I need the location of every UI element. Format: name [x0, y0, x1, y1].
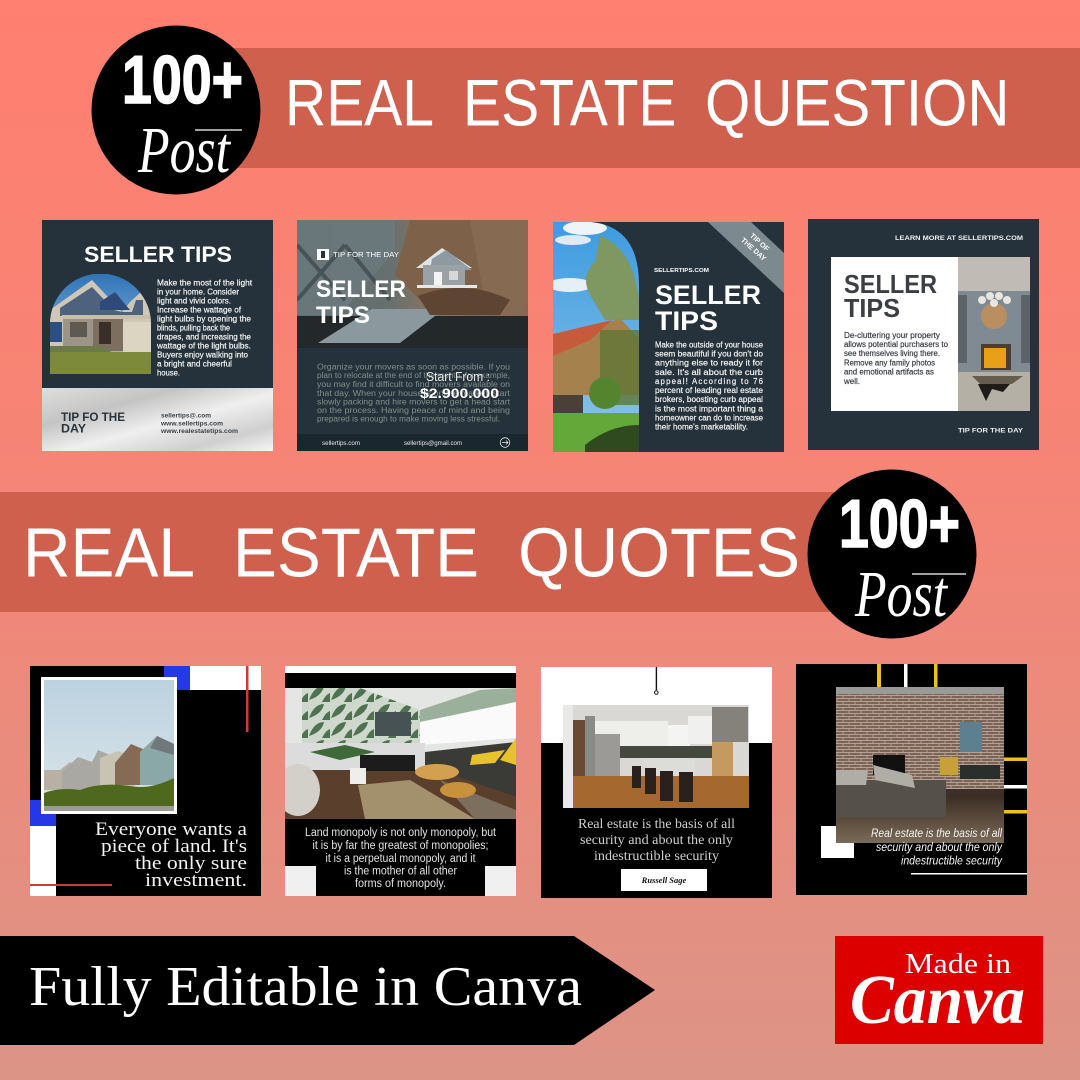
- quote card 4 accent stripes: [877, 664, 1027, 874]
- quote card 1 text: investment.: [145, 871, 247, 891]
- card 2 photo: hand holding model house: [297, 220, 528, 348]
- card 3 photo: wooden house and tree in arch: [548, 221, 640, 452]
- heading: real estate quotes: QUOTES: [518, 514, 800, 592]
- heading: real estate question: [285, 66, 1010, 140]
- quote card 3 text: Real estate is the basis of all: [578, 816, 735, 831]
- card 2 footer contact: sellertips.com: [322, 440, 360, 447]
- card 3 body text: their home's marketability.: [655, 423, 748, 432]
- card 3 title: TIPS: [655, 306, 718, 336]
- card 1 contact text: www.realestatetips.com: [160, 428, 238, 435]
- card 4 body text: allows potential purchasers to: [844, 340, 949, 349]
- heading: real estate question: QUESTION: [705, 66, 1010, 140]
- quote card 3 white top: [541, 667, 772, 743]
- heading: real estate question: ESTATE: [463, 66, 676, 140]
- header banner: real estate quotes: [0, 492, 850, 612]
- quote card 1 text: the only sure: [135, 854, 247, 874]
- card 1 contact text: sellertips@.com: [161, 412, 211, 420]
- panel: quote card 1: [30, 666, 261, 896]
- panel: quote card 3: [541, 667, 772, 898]
- card 1 title: SELLER TIPS: [84, 242, 232, 267]
- badge: 100+ post (middle): [808, 470, 976, 638]
- card 4 title: TIPS: [844, 293, 900, 323]
- quote card 2 text: it is by far the greatest of monopolies;: [312, 840, 488, 852]
- card 2 body text: that day. When your house is on the market, start: [317, 389, 511, 398]
- card 2 body text: slowly packing and hire movers to get a head start: [317, 398, 511, 406]
- badge: 100+ post (top): [92, 26, 260, 194]
- quote card 1 text: piece of land. It's: [101, 837, 247, 857]
- card 1 photo: suburban house in arch: [50, 274, 151, 374]
- quote card 4 text: indestructible security: [901, 854, 1003, 868]
- panel: seller tips card 4: [808, 219, 1039, 450]
- card 1 body text: blinds, pulling back the: [157, 324, 230, 332]
- card 4 body text: well.: [843, 377, 860, 386]
- card 2 title: TIPS: [316, 302, 370, 329]
- quote card 1 photo frame: [41, 677, 177, 814]
- quote card 1 photo: row of houses: [44, 680, 174, 811]
- card 2 price overlay: $2.900.000: [420, 386, 499, 401]
- quote card 4 text: security and about the only: [876, 840, 1003, 854]
- card 1 tip label: DAY: [61, 422, 86, 436]
- quote card 3 author button: Russell Sage: [641, 875, 687, 885]
- quote card 4 white square: [821, 826, 854, 858]
- heading: real estate quotes: [23, 514, 800, 592]
- quote card 2 corner blocks: [285, 866, 516, 896]
- card 2 icon: arrow circle: [500, 438, 510, 447]
- badge: 100+ post (middle): Post: [854, 558, 948, 631]
- heading: real estate quotes: ESTATE: [233, 514, 479, 592]
- card 3 body text: [655, 340, 764, 432]
- quote card 2 top strip: [285, 666, 516, 673]
- badge: 100+ post (top): 100+: [122, 42, 243, 118]
- card 3 body text: homeowner can do to increase: [655, 414, 763, 422]
- card 1 body text: in your home. Consider: [157, 288, 239, 296]
- card 3 body text: brokers, boosting curb appeal: [655, 395, 763, 404]
- panel: seller tips card 1: [42, 220, 273, 451]
- quote card 3 photo: kitchen: [563, 705, 749, 808]
- card 2 price overlay: Start From :: [426, 370, 490, 384]
- card 3 body text: percent of leading real estate: [655, 386, 763, 395]
- quote card 4 text: [871, 826, 1003, 868]
- card 3 ribbon text: TIP OF: [748, 231, 772, 254]
- card 3 site label: SELLERTIPS.COM: [654, 268, 709, 274]
- card 1 tip label: [61, 410, 125, 436]
- quote card 4 photo: brick wall loft: [836, 687, 1004, 843]
- quote card 3 author button: [621, 869, 707, 891]
- quote card 3 text: security and about the only: [580, 832, 733, 847]
- card 2 tip label: TIP FOR THE DAY: [333, 250, 399, 259]
- quote card 2 text: forms of monopoly.: [355, 878, 446, 890]
- card 4 photo: living room with fireplace: [958, 257, 1030, 411]
- card 2 title: SELLER: [316, 276, 406, 303]
- badge: 100+ post (top): Post: [137, 114, 231, 187]
- badge: 100+ post (middle): 100+: [839, 486, 960, 562]
- call-to-action text: Fully Editable in Canva: [29, 956, 582, 1018]
- card 2 footer contact: [322, 440, 462, 447]
- card 3 body text: is the most important thing a: [655, 404, 764, 413]
- card 3 ribbon text: THE DAY: [739, 235, 768, 263]
- card 4 body text: and emotional artifacts as: [844, 368, 934, 377]
- card 4 top link: LEARN MORE AT SELLERTIPS.COM: [895, 235, 1023, 242]
- card 2 footer bar: [297, 434, 528, 451]
- card 3 body text: appeal! According to 76: [655, 377, 763, 386]
- card 2 logo icon: [317, 249, 329, 260]
- quote card 2 text: is the mother of all other: [344, 866, 457, 878]
- quote card 1 text: Everyone wants a: [95, 820, 247, 840]
- card 1 body text: Make the most of the light: [157, 278, 253, 288]
- card 1 body text: light bulbs by opening the: [157, 314, 251, 324]
- heading: real estate quotes: REAL: [23, 514, 195, 592]
- card 4 footer label: TIP FOR THE DAY: [958, 428, 1024, 434]
- quote card 1 corner blocks: [30, 666, 261, 896]
- card 4 title: [844, 269, 937, 323]
- card 2 body text: you may find it difficult to find movers available on: [317, 380, 510, 389]
- card 3 body text: sale. It's all about the curb: [655, 368, 764, 377]
- panel: seller tips card 2: [297, 220, 528, 451]
- quote card 2 photo: living room with sofa: [276, 688, 516, 819]
- quote card 3 text: [578, 816, 735, 863]
- card 2 title: [316, 276, 406, 329]
- quote card 3 text: indestructible security: [594, 848, 719, 863]
- canva script wordmark: Canva: [850, 962, 1025, 1039]
- card 1 contact text: www.sellertips.com: [160, 420, 223, 428]
- card 1 body text: [156, 278, 253, 378]
- card 2 body text: plan to relocate at the end of the month, for example,: [317, 371, 510, 380]
- card 1 body text: a bright and cheerful: [157, 360, 232, 368]
- card 3 title: SELLER: [655, 280, 761, 310]
- card 1 body text: light and vivid colors.: [157, 296, 231, 306]
- header banner: real estate question: [230, 48, 1080, 168]
- card 1 tip label: TIP FO THE: [61, 410, 125, 424]
- card 3 body text: seem beautiful if you don't do: [655, 350, 764, 358]
- card 2 body text: Organize your movers as soon as possible. If you: [317, 362, 510, 372]
- card 1 body text: Buyers enjoy walking into: [157, 350, 249, 360]
- made in canva badge: [835, 936, 1043, 1044]
- card 4 body text: [843, 331, 949, 386]
- card 3 title: [655, 280, 761, 336]
- card 4 white panel: [831, 257, 958, 411]
- quote card 2 text: Land monopoly is not only monopoly, but: [305, 827, 497, 839]
- quote card 2 text: it is a perpetual monopoly, and it: [326, 853, 476, 865]
- card 4 title: SELLER: [844, 269, 937, 299]
- card 2 body text: prepared is enough to make moving less stressful.: [317, 414, 500, 424]
- card 4 body text: Remove any family photos: [844, 358, 935, 368]
- card 1 silver footer band: [42, 388, 273, 451]
- quote card 4 text: Real estate is the basis of all: [871, 826, 1002, 840]
- card 2 body text: [317, 362, 511, 424]
- panel: seller tips card 3: [548, 221, 784, 452]
- made in text: Made in: [905, 949, 1011, 980]
- panel: quote card 4: [796, 664, 1027, 895]
- card 3 ribbon: [708, 222, 784, 293]
- card 1 body text: drapes, and increasing the: [157, 332, 251, 342]
- card 2 body text: on the process. Having peace of mind and being: [317, 406, 510, 415]
- call-to-action arrow banner: [0, 936, 655, 1045]
- quote card 2 text: [305, 827, 497, 890]
- card 1 body text: wattage of the light bulbs.: [156, 342, 251, 350]
- heading: real estate question: REAL: [285, 66, 434, 140]
- card 1 contact text: [160, 412, 238, 435]
- card 2 footer contact: sellertips@gmail.com: [404, 440, 462, 447]
- quote card 3 pendant: [654, 667, 658, 694]
- card 2 price overlay: [420, 370, 499, 401]
- card 3 body text: Make the outside of your house: [655, 340, 763, 350]
- panel: quote card 2: [276, 666, 516, 896]
- card 3 body text: anything else to ready it for: [655, 359, 763, 368]
- card 4 body text: De-cluttering your property: [844, 331, 940, 340]
- card 2 icon: model house: [416, 248, 477, 288]
- card 1 body text: Increase the wattage of: [157, 306, 242, 314]
- card 4 body text: see themselves living there.: [844, 349, 940, 358]
- card 1 body text: house.: [157, 368, 180, 378]
- quote card 1 text: [95, 820, 247, 891]
